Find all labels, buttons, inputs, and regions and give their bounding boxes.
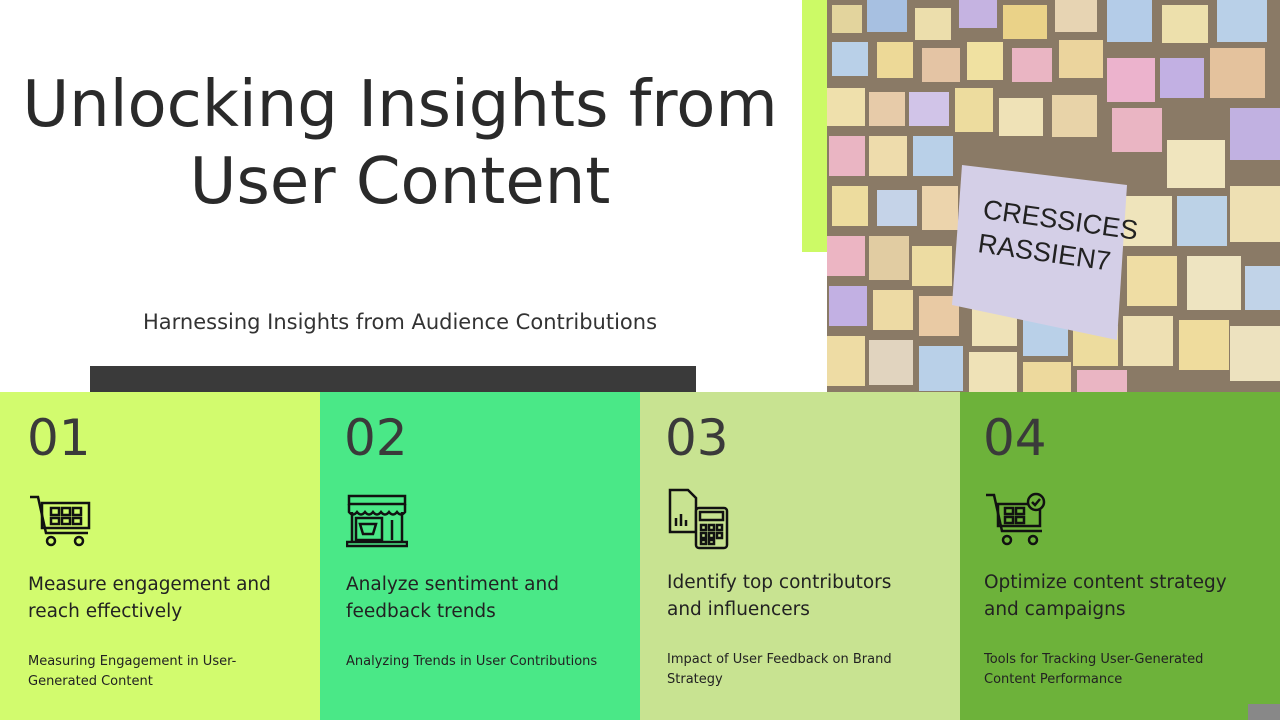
title: User Content bbox=[190, 145, 610, 219]
heading 2: Analyze sentiment and feedback trends bbox=[346, 574, 559, 622]
panel 4 bbox=[960, 392, 1280, 720]
number 02: 02 bbox=[344, 409, 408, 467]
dark bar bbox=[90, 366, 696, 392]
icon: cart with check bbox=[986, 492, 1046, 546]
sub text 2: Analyzing Trends in User Contributions bbox=[346, 654, 597, 669]
photo: sticky notes wall: RASSIEN7 bbox=[976, 228, 1113, 277]
panel 3 bbox=[640, 392, 960, 720]
icon: document and calculator bbox=[668, 488, 728, 550]
icon: shopping cart bbox=[30, 496, 90, 546]
subtitle: Harnessing Insights from Audience Contributions bbox=[143, 310, 657, 334]
number 01: 01 bbox=[27, 409, 91, 467]
heading 1: Measure engagement and reach effectively bbox=[28, 574, 271, 622]
accent green bar bbox=[802, 0, 827, 252]
sub text 4: Tools for Tracking User-Generated Content Performance bbox=[984, 652, 1203, 687]
panel 2 bbox=[320, 392, 640, 720]
icon: storefront bbox=[346, 494, 408, 548]
heading 4: Optimize content strategy and campaigns bbox=[984, 572, 1227, 620]
sub text 3: Impact of User Feedback on Brand Strategy bbox=[667, 652, 892, 687]
photo: sticky notes wall bbox=[827, 0, 1280, 392]
corner grey box bbox=[1248, 704, 1280, 720]
title: Unlocking Insights from bbox=[22, 68, 778, 142]
sub text 1: Measuring Engagement in User-Generated Content bbox=[28, 654, 236, 689]
number 04: 04 bbox=[983, 409, 1047, 467]
number 03: 03 bbox=[665, 409, 729, 467]
panel 1 bbox=[0, 392, 320, 720]
photo: sticky notes wall: CRESSICES bbox=[981, 194, 1140, 246]
heading 3: Identify top contributors and influencers bbox=[667, 572, 891, 620]
title bbox=[22, 68, 778, 219]
